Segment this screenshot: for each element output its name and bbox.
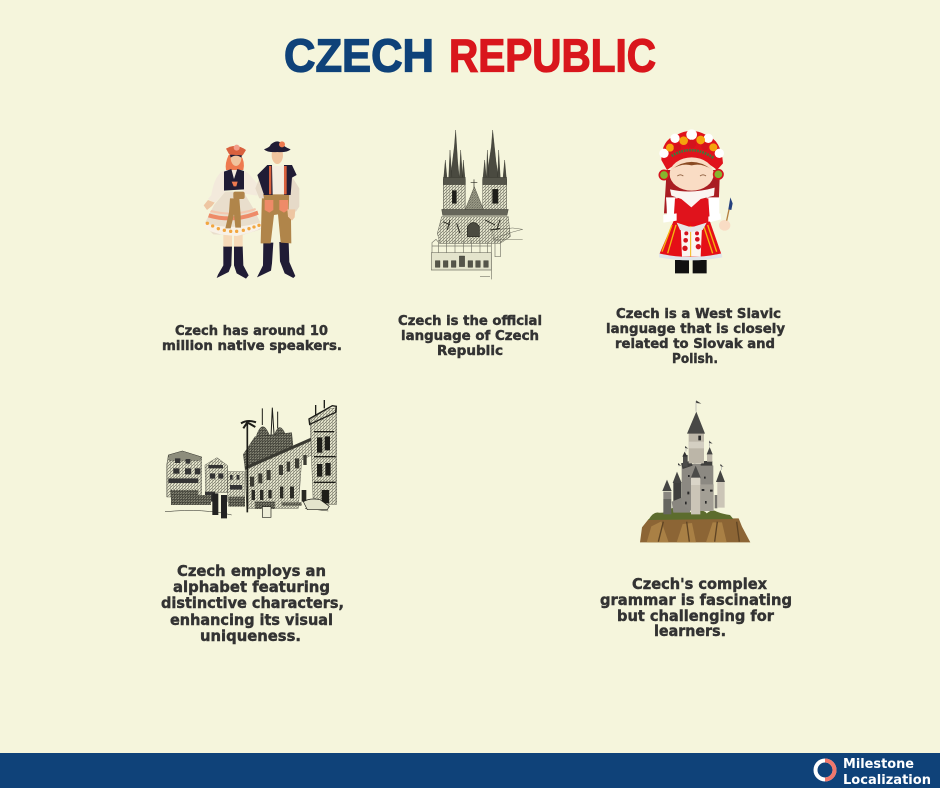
- text: official language fact: [398, 313, 542, 359]
- title: [284, 30, 656, 82]
- text: speakers fact: [162, 323, 342, 354]
- title: CZECH: [284, 30, 434, 82]
- title: REPUBLIC: [449, 30, 656, 82]
- icon: folk doll in red costume: [659, 129, 733, 273]
- text: West Slavic fact: Czech is a West Slavic: [616, 306, 781, 322]
- text: grammar fact: but challenging for: [617, 607, 774, 625]
- text: official language fact: language of Czech: [401, 328, 539, 344]
- text: official language fact: Republic: [437, 343, 503, 359]
- icon: couple in folk costume: [203, 141, 299, 279]
- text: alphabet fact: alphabet featuring: [173, 578, 330, 596]
- text: West Slavic fact: related to Slovak and: [615, 336, 775, 352]
- text: speakers fact: million native speakers.: [162, 338, 342, 354]
- text: alphabet fact: Czech employs an: [177, 562, 326, 580]
- footer logo: Milestone Localization: Localization: [843, 773, 931, 788]
- footer logo: Milestone Localization: Milestone: [843, 757, 914, 772]
- text: official language fact: Czech is the official: [398, 313, 542, 329]
- text: alphabet fact: enhancing its visual: [170, 611, 333, 629]
- text: West Slavic fact: Polish.: [672, 351, 718, 367]
- text: West Slavic fact: [606, 306, 785, 367]
- text: alphabet fact: [161, 562, 344, 645]
- icon: old town square sketch: [165, 400, 337, 518]
- icon: Tyn church sketch: [431, 130, 523, 279]
- icon: castle on a cliff: [640, 400, 750, 542]
- text: grammar fact: grammar is fascinating: [600, 591, 792, 609]
- text: West Slavic fact: language that is closely: [606, 321, 785, 337]
- text: speakers fact: Czech has around 10: [175, 323, 328, 339]
- text: grammar fact: Czech's complex: [632, 575, 767, 593]
- text: grammar fact: [600, 575, 792, 640]
- footer bar: [0, 753, 940, 788]
- text: alphabet fact: uniqueness.: [200, 627, 301, 645]
- text: alphabet fact: distinctive characters,: [161, 594, 344, 612]
- text: grammar fact: learners.: [654, 622, 726, 640]
- footer logo: Milestone Localization: [816, 757, 931, 788]
